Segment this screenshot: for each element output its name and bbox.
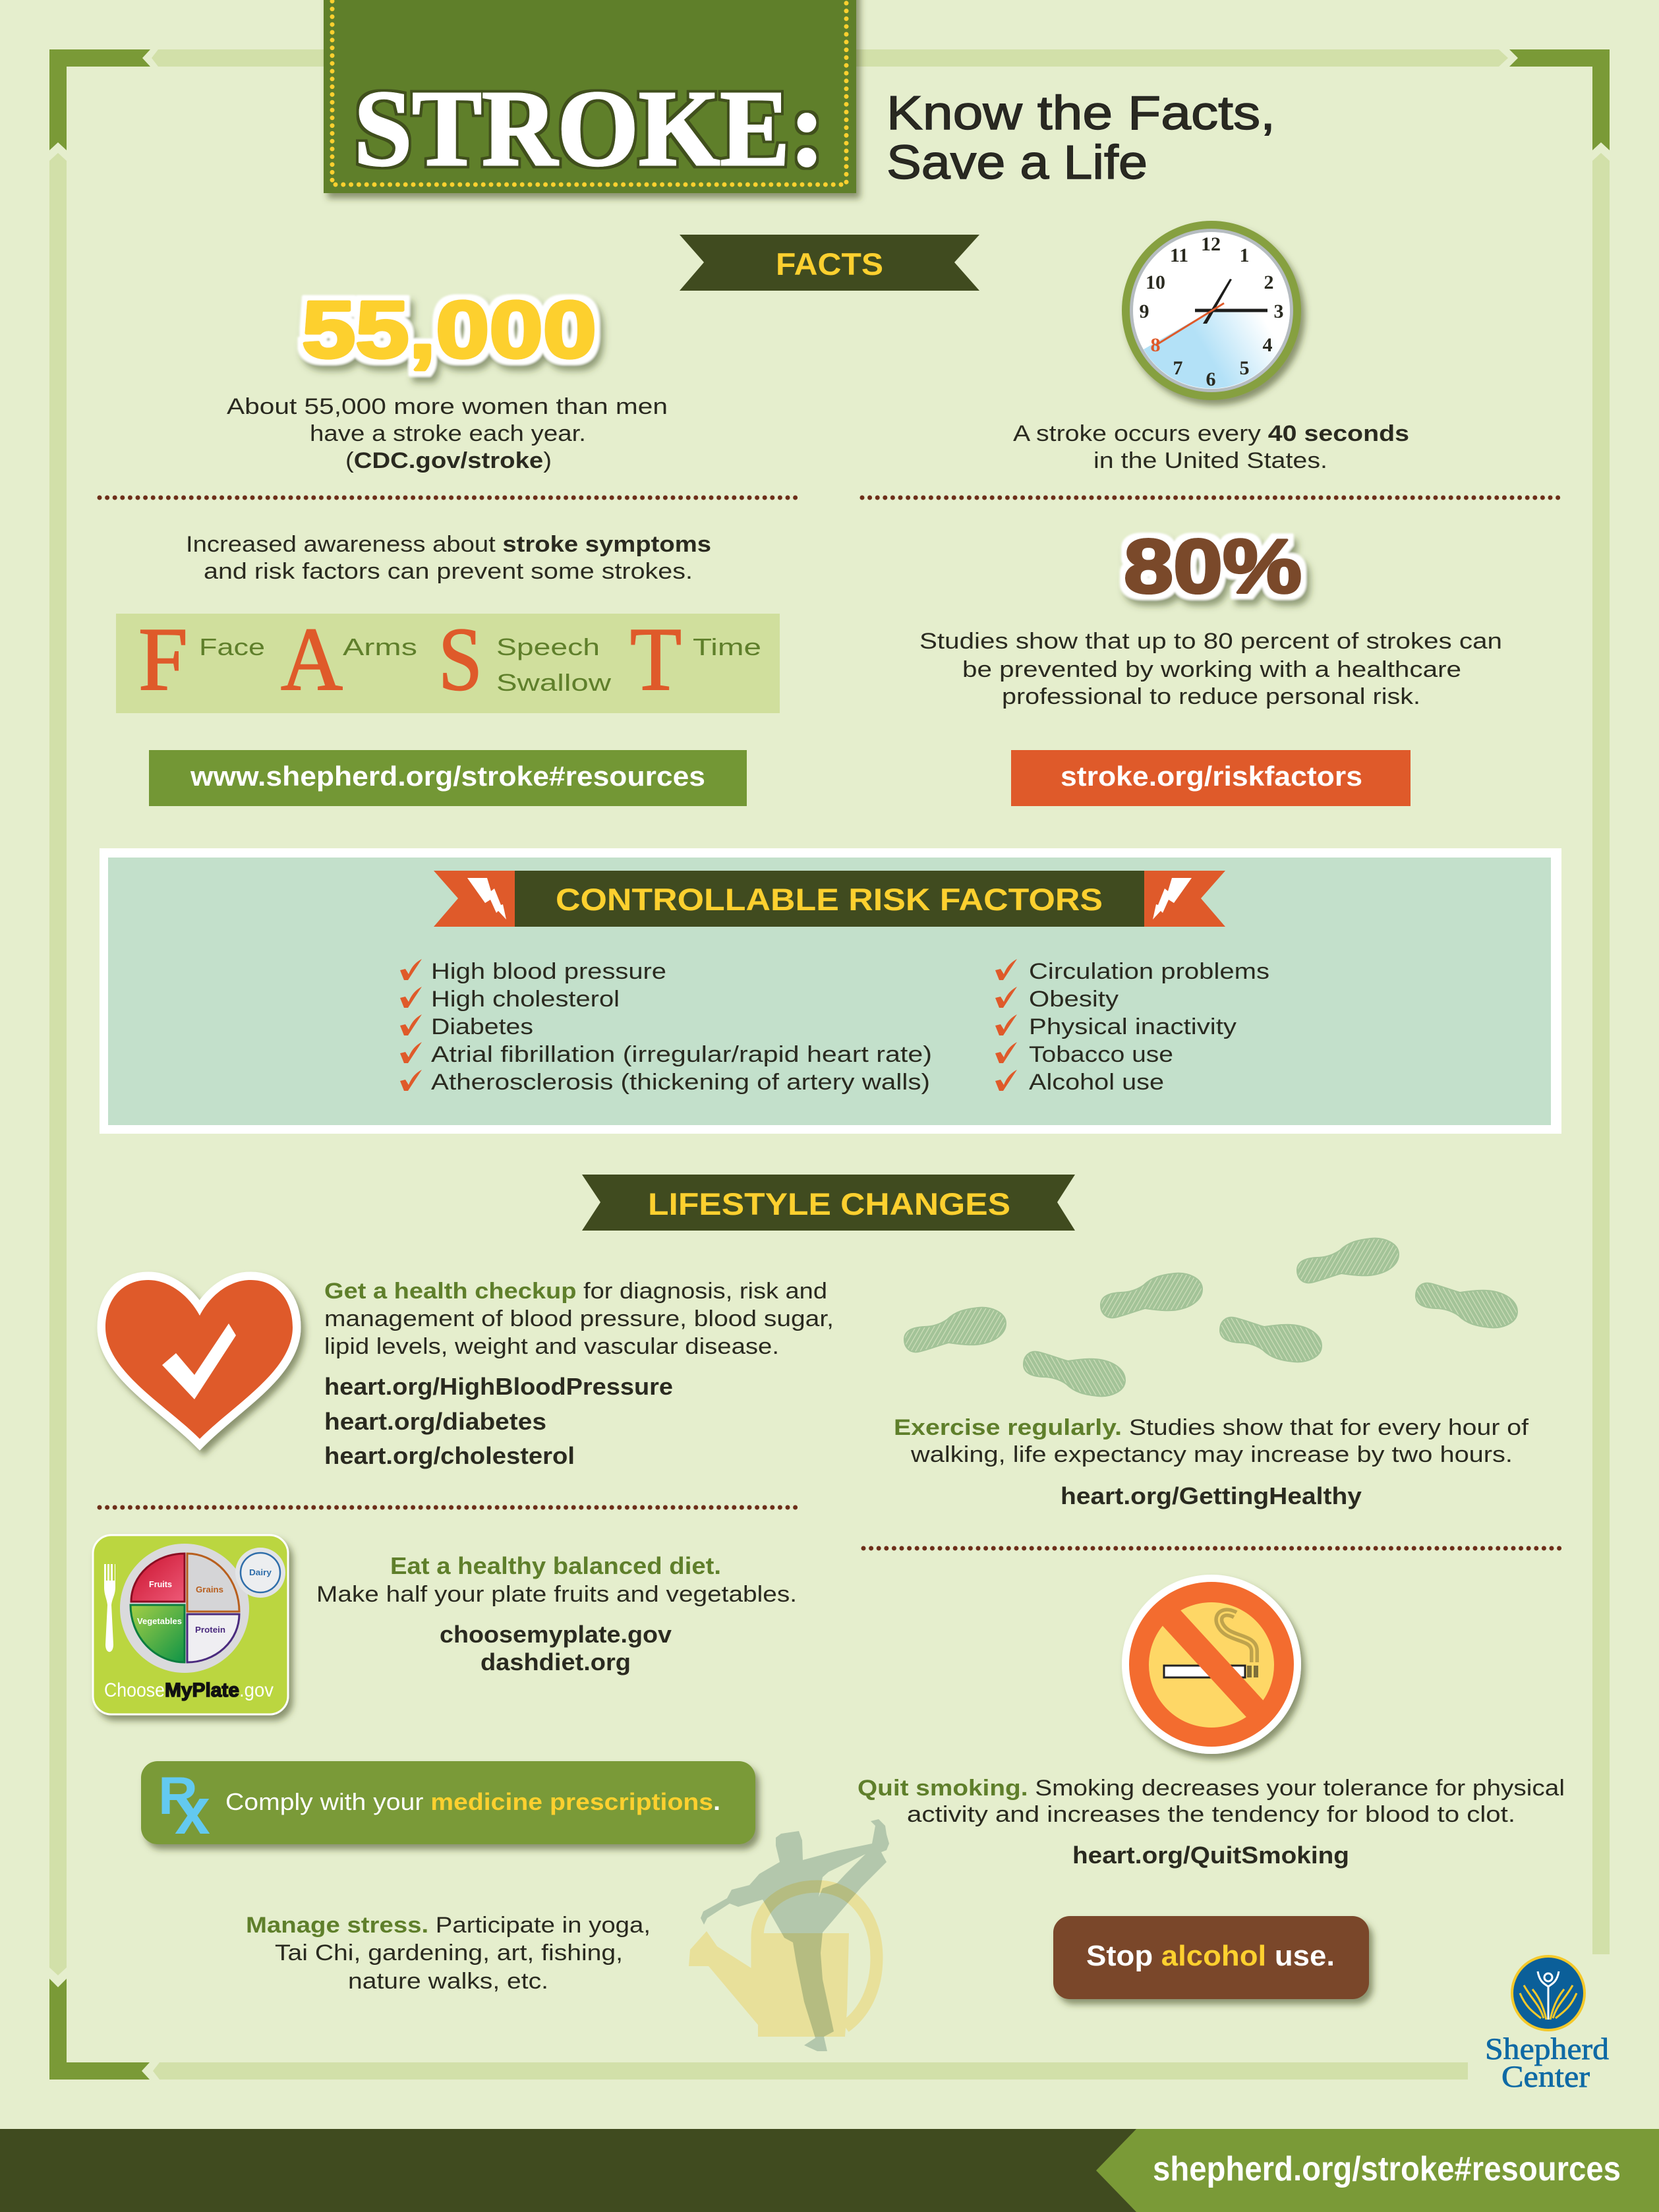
icon: heart with check	[105, 1280, 293, 1439]
text: quit smoking: heart.org/QuitSmoking	[1072, 1842, 1349, 1869]
icon: clock: 2	[1264, 272, 1273, 293]
icon: clock: 9	[1139, 301, 1150, 322]
subtitle: Save a Life	[887, 136, 1148, 189]
text: health checkup: heart.org/cholesterol	[324, 1442, 575, 1469]
button: risk factors: stroke.org/riskfactors	[1061, 761, 1362, 792]
text: manage stress: nature walks, etc.	[348, 1969, 548, 1994]
title: STROKE:: STROKE:	[354, 68, 825, 189]
text: quit smoking: activity and increases the tendency for blood to clot.	[907, 1802, 1515, 1827]
icon: MyPlate: Vegetables	[137, 1616, 182, 1626]
facts banner	[680, 235, 979, 291]
callout: stop alcohol	[1053, 1916, 1369, 1999]
icon: Rx: x	[175, 1774, 210, 1848]
button: shepherd resources: www.shepherd.org/stroke#resources	[190, 761, 705, 792]
ribbon heading	[434, 871, 1225, 927]
stat: 55,000: 55,000	[302, 285, 597, 374]
icon: clock: 12	[1201, 233, 1221, 255]
panel: FAST: Speech	[496, 633, 600, 660]
icon: person silhouette	[701, 1819, 889, 2051]
icon: Rx: R	[158, 1766, 198, 1826]
panel: FAST: Time	[693, 633, 761, 660]
lifestyle changes banner: LIFESTYLE CHANGES	[648, 1186, 1010, 1221]
lifestyle changes banner	[582, 1175, 1075, 1231]
icon: clock: 10	[1146, 272, 1165, 293]
text: 80 percent: be prevented by working with a healthcare	[962, 657, 1461, 682]
list: right column: Circulation problems	[1029, 959, 1269, 984]
subtitle: Know the Facts,	[887, 87, 1275, 140]
icon: MyPlate: .gov	[239, 1679, 274, 1701]
button: shepherd resources	[149, 750, 747, 806]
text: exercise	[894, 1415, 1529, 1509]
panel: FAST: Face	[199, 633, 265, 660]
list: left column	[431, 959, 932, 1095]
panel: FAST: A	[281, 609, 343, 709]
panel: FAST: Swallow	[496, 669, 612, 696]
text: exercise: walking, life expectancy may increase by two hours.	[910, 1442, 1513, 1467]
panel: FAST: S	[438, 609, 482, 709]
icon: clock: 7	[1173, 357, 1182, 379]
icon: Rx	[158, 1766, 210, 1848]
text: awareness	[186, 532, 711, 584]
callout: prescriptions: Comply with your medicine prescriptions .	[225, 1788, 720, 1815]
text: exercise: Exercise regularly. Studies show that for every hour of	[894, 1415, 1529, 1440]
callout: stop alcohol: Stop alcohol use.	[1086, 1940, 1335, 1972]
icon: no smoking	[1122, 1575, 1301, 1754]
logo: Shepherd Center	[1485, 1956, 1609, 2094]
footer bar	[0, 2129, 1659, 2212]
list: left column: High blood pressure	[431, 959, 666, 984]
text: health checkup: heart.org/HighBloodPressure	[324, 1373, 673, 1400]
text: quit smoking	[858, 1776, 1565, 1869]
list: left column: Atrial fibrillation (irregular/rapid heart rate)	[431, 1042, 932, 1067]
text: manage stress	[246, 1913, 651, 1994]
title panel	[324, 0, 856, 193]
panel: FAST: Arms	[343, 633, 417, 660]
text: health checkup	[324, 1279, 834, 1469]
icon: watering can	[689, 1886, 877, 2037]
list: left column: High cholesterol	[431, 987, 620, 1012]
text: awareness: Increased awareness about stroke symptoms	[186, 532, 711, 557]
text: every 40 seconds: A stroke occurs every 40 seconds	[1013, 421, 1409, 446]
icon: clock: 4	[1263, 334, 1272, 356]
list: right column: Obesity	[1029, 987, 1119, 1012]
text: 80 percent: Studies show that up to 80 percent of strokes can	[919, 629, 1502, 654]
list: right column: Tobacco use	[1029, 1042, 1173, 1067]
list: right column	[1029, 959, 1269, 1095]
text: healthy diet: choosemyplate.gov	[440, 1621, 672, 1648]
icon: clock: 3	[1273, 301, 1284, 322]
logo: Shepherd Center: Shepherd	[1485, 2032, 1609, 2066]
checkmarks	[400, 959, 1017, 1091]
footer bar: shepherd.org/stroke#resources	[1153, 2150, 1621, 2188]
text: health checkup: heart.org/diabetes	[324, 1408, 546, 1435]
icon: MyPlate: Fruits	[149, 1579, 172, 1589]
text: quit smoking: Quit smoking. Smoking decreases your tolerance for physical	[858, 1776, 1565, 1801]
text: healthy diet: Make half your plate fruits and vegetables.	[316, 1582, 797, 1607]
text: awareness: and risk factors can prevent some strokes.	[204, 559, 693, 584]
text: 55,000 women: (CDC.gov/stroke )	[345, 448, 552, 473]
callout: prescriptions	[141, 1761, 755, 1848]
subtitle	[887, 87, 1275, 189]
text: exercise: heart.org/GettingHealthy	[1061, 1482, 1362, 1509]
text: 55,000 women: About 55,000 more women than men	[227, 394, 668, 419]
list: left column: Atherosclerosis (thickening of artery walls)	[431, 1070, 930, 1095]
icon: MyPlate: Dairy	[249, 1567, 272, 1577]
text: health checkup: lipid levels, weight and vascular disease.	[324, 1334, 779, 1359]
icon: clock: 6	[1206, 368, 1215, 390]
icon: MyPlate: Choose	[104, 1679, 165, 1701]
icon: clock: 5	[1239, 357, 1250, 379]
stat: 80%: 80%	[1124, 523, 1302, 609]
text: manage stress: Manage stress. Participate in yoga,	[246, 1913, 651, 1938]
text: 80 percent: professional to reduce personal risk.	[1002, 684, 1420, 709]
icon: clock: 11	[1170, 245, 1188, 266]
logo: Shepherd Center: Center	[1501, 2060, 1590, 2094]
text: every 40 seconds	[1013, 421, 1409, 473]
text: health checkup: Get a health checkup for diagnosis, risk and	[324, 1279, 827, 1304]
panel: FAST: F	[138, 609, 188, 709]
text: healthy diet: Eat a healthy balanced diet.	[390, 1552, 721, 1579]
icon: MyPlate: Protein	[195, 1625, 225, 1635]
list: left column: Diabetes	[431, 1014, 533, 1039]
panel: FAST: T	[630, 609, 682, 709]
icon: clock: 8	[1151, 334, 1160, 356]
panel: controllable risk factors	[100, 848, 1561, 1134]
icon: clock: 1	[1239, 245, 1250, 266]
text: 55,000 women: have a stroke each year.	[310, 421, 586, 446]
icon: footprints	[904, 1238, 1517, 1396]
text: 55,000 women	[227, 394, 668, 473]
text: health checkup: management of blood pressure, blood sugar,	[324, 1306, 834, 1331]
list: right column: Physical inactivity	[1029, 1014, 1237, 1039]
icon: MyPlate	[93, 1535, 288, 1714]
text: healthy diet: dashdiet.org	[480, 1648, 631, 1675]
list: right column: Alcohol use	[1029, 1070, 1164, 1095]
button: risk factors	[1011, 750, 1411, 806]
text: every 40 seconds: in the United States.	[1093, 448, 1327, 473]
text: 80 percent	[919, 629, 1502, 709]
text: healthy diet	[316, 1552, 797, 1675]
icon: clock	[1122, 221, 1301, 400]
ribbon heading: CONTROLLABLE RISK FACTORS	[556, 882, 1103, 917]
panel: FAST	[116, 609, 780, 713]
icon: MyPlate: MyPlate	[165, 1679, 239, 1701]
icon: MyPlate: Grains	[196, 1585, 223, 1594]
text: manage stress: Tai Chi, gardening, art, fishing,	[275, 1940, 623, 1965]
facts banner: FACTS	[776, 247, 883, 281]
